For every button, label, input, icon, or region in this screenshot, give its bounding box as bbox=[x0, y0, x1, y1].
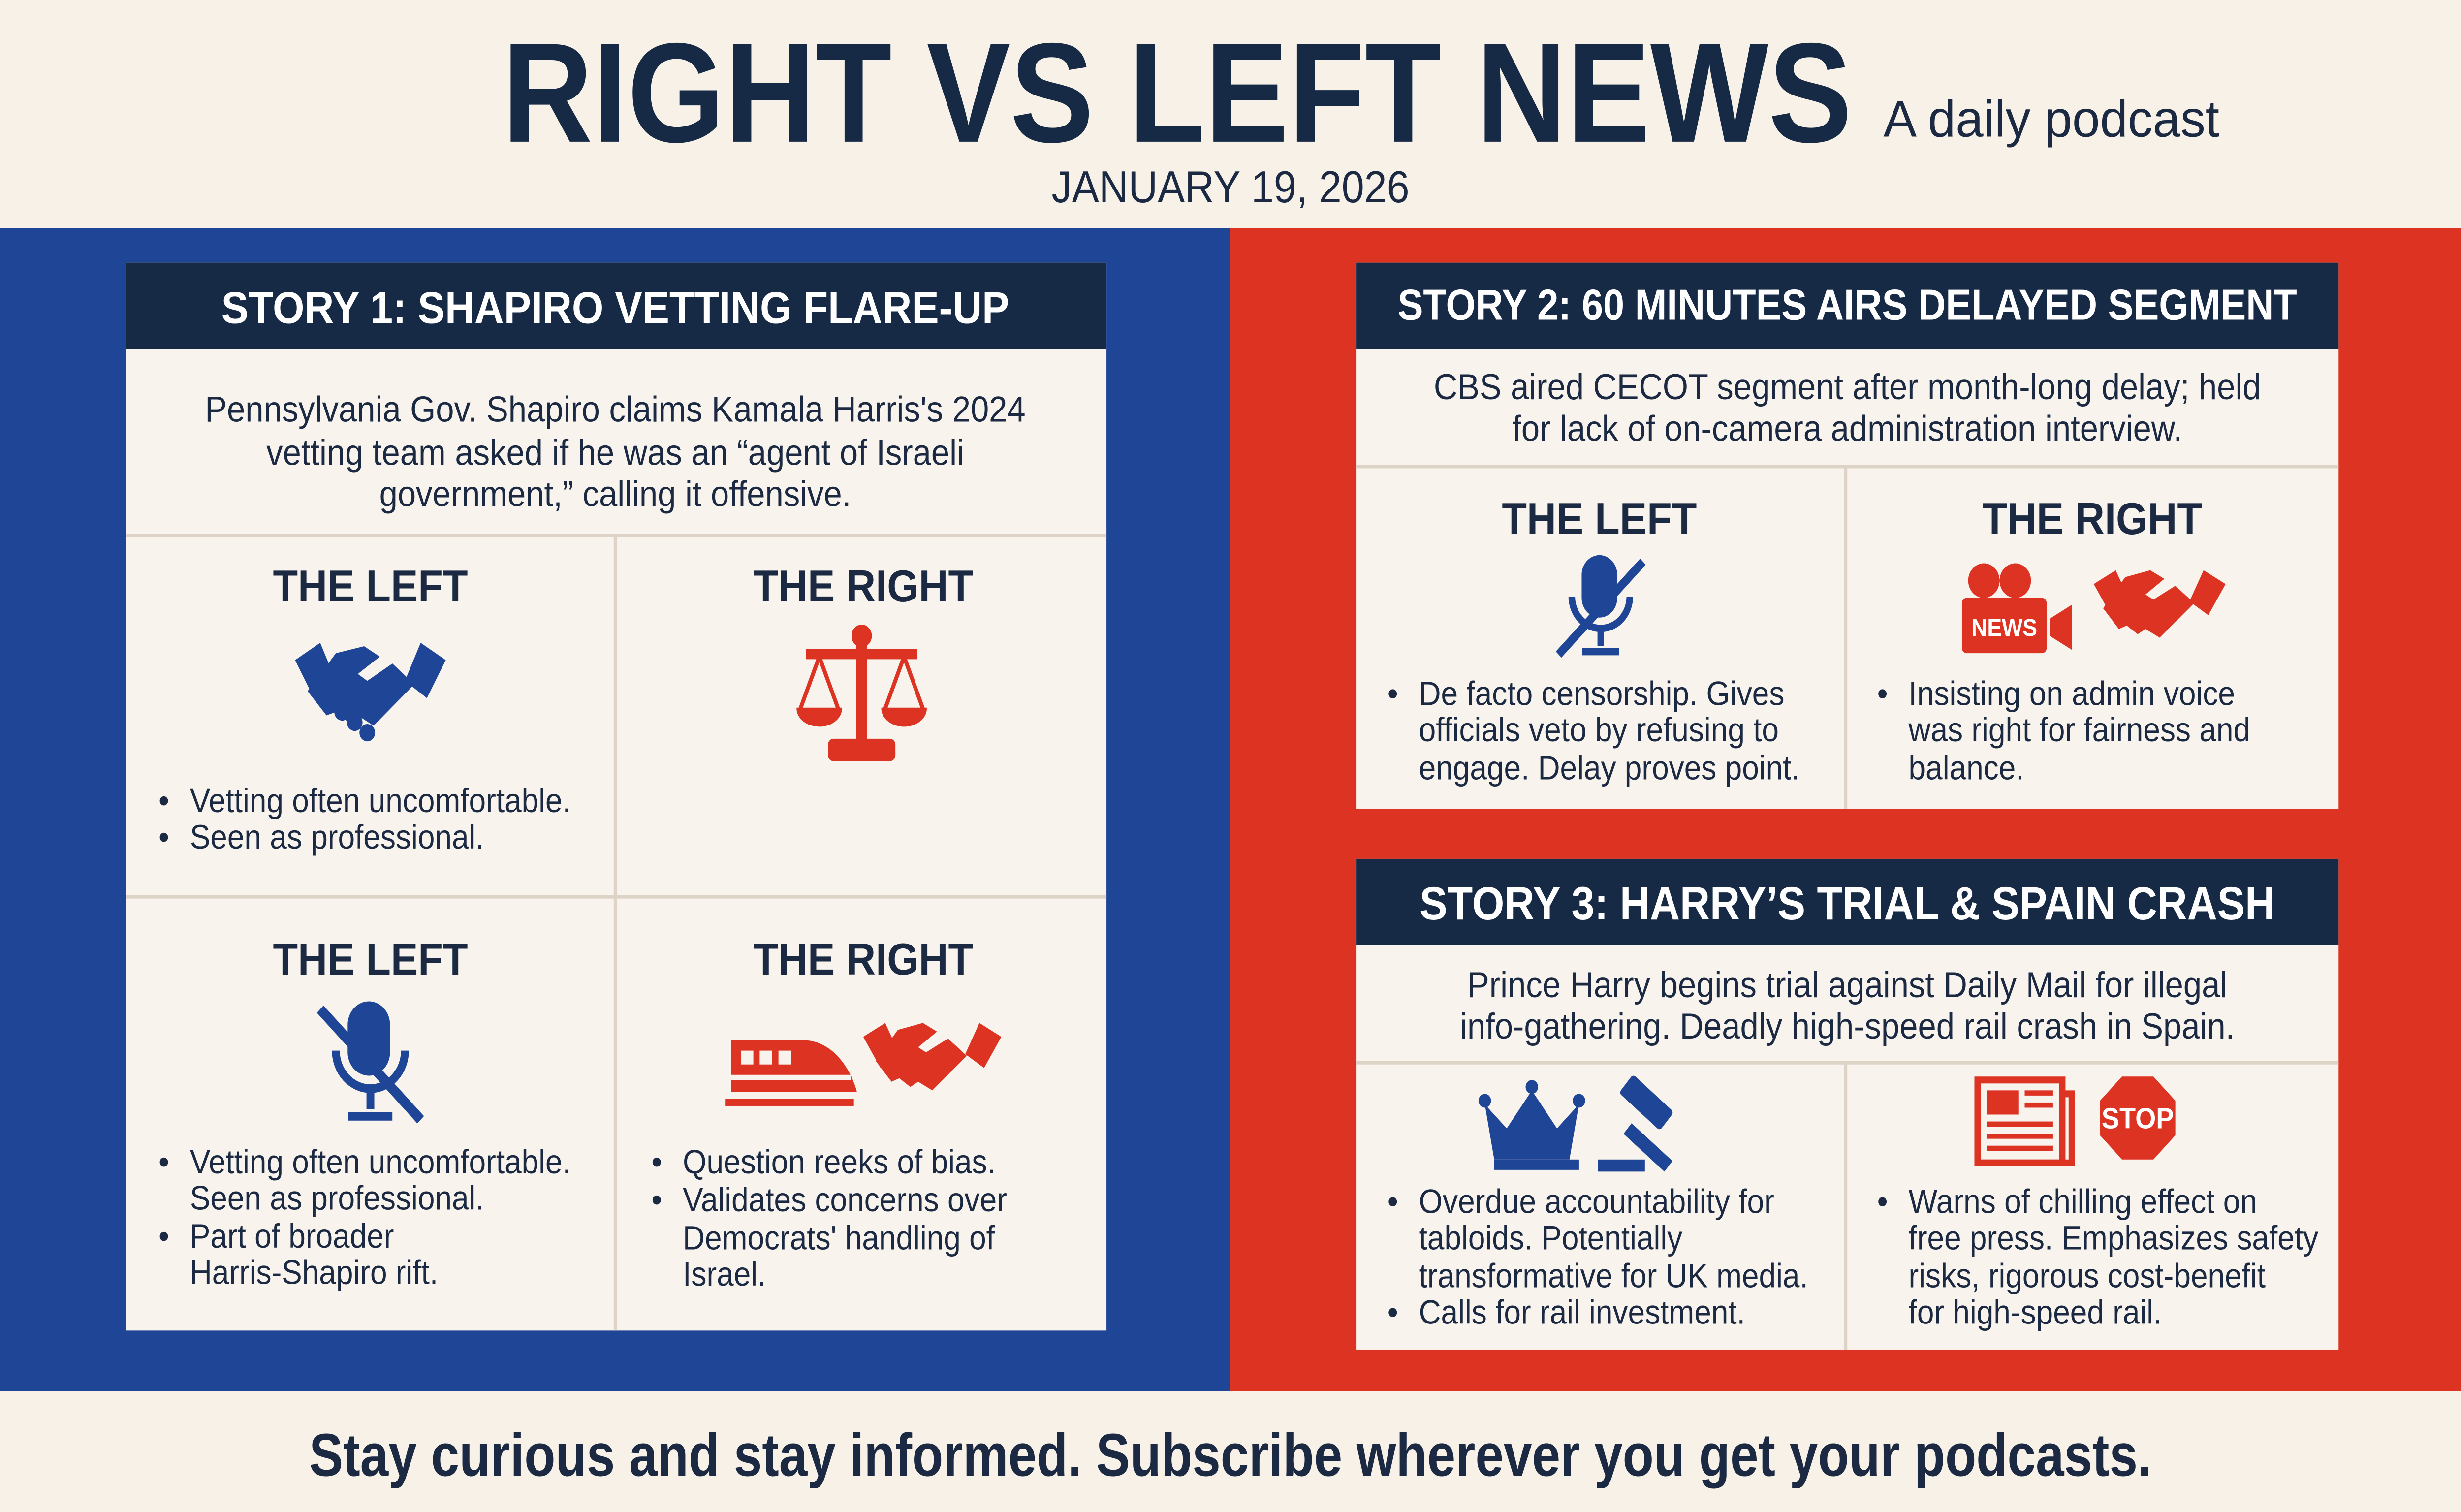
left bullets: transformative for UK media. bbox=[1419, 1257, 1808, 1294]
icon: news camera and handshake: NEWS bbox=[1971, 614, 2037, 641]
right bullets: was right for fairness and bbox=[1908, 711, 2250, 749]
story 2 intro: for lack of on-camera administration interview. bbox=[1512, 408, 2182, 448]
right heading: THE RIGHT bbox=[1982, 494, 2202, 544]
right bullets 2: Question reeks of bias. bbox=[683, 1143, 996, 1181]
story 2 intro bbox=[1434, 366, 2261, 448]
left heading 1: THE LEFT bbox=[273, 561, 468, 611]
left bullets 1: Vetting often uncomfortable. bbox=[190, 782, 571, 819]
story 2 heading bbox=[1356, 263, 2338, 349]
story 1 heading bbox=[126, 263, 1106, 349]
left bullets: Overdue accountability for bbox=[1419, 1183, 1774, 1220]
icon: news camera and handshake bbox=[1962, 564, 2226, 653]
right heading 2: THE RIGHT bbox=[753, 934, 973, 984]
left bullets 1 bbox=[158, 782, 571, 855]
story 1 intro: Pennsylvania Gov. Shapiro claims Kamala Harris's 2024 bbox=[205, 389, 1026, 429]
left bullets: engage. Delay proves point. bbox=[1419, 749, 1800, 787]
subtitle: A daily podcast bbox=[1884, 90, 2219, 148]
right bullets 2: • bbox=[651, 1143, 662, 1181]
icon: scales bbox=[797, 626, 926, 760]
left bullets: • bbox=[1388, 675, 1398, 712]
story 1 intro bbox=[205, 389, 1026, 514]
story 3 heading: STORY 3: HARRY’S TRIAL & SPAIN CRASH bbox=[1420, 878, 2275, 930]
panel: story 3 bbox=[1356, 859, 2338, 1350]
left bullets: • bbox=[1388, 1183, 1398, 1220]
left bullets 1: • bbox=[158, 818, 169, 855]
right bullets: balance. bbox=[1909, 749, 2024, 787]
right bullets 2: • bbox=[651, 1181, 662, 1219]
blue panel bbox=[0, 228, 1230, 1391]
story 2 heading: STORY 2: 60 MINUTES AIRS DELAYED SEGMENT bbox=[1398, 281, 2297, 329]
icon: crown and gavel bbox=[1479, 1074, 1674, 1171]
panel: story 2 bbox=[1356, 263, 2338, 809]
right bullets 2: Democrats' handling of bbox=[683, 1219, 995, 1257]
right bullets 2: Validates concerns over bbox=[683, 1181, 1007, 1219]
left heading 2: THE LEFT bbox=[273, 934, 468, 984]
story 1 intro: government,” calling it offensive. bbox=[379, 473, 851, 514]
left bullets 2: • bbox=[158, 1143, 169, 1181]
story 3 intro: Prince Harry begins trial against Daily Mail for illegal bbox=[1467, 964, 2227, 1005]
right bullets bbox=[1877, 675, 2250, 787]
story 3 intro bbox=[1460, 964, 2235, 1046]
left bullets: De facto censorship. Gives bbox=[1419, 675, 1784, 712]
right bullets: Warns of chilling effect on bbox=[1909, 1183, 2257, 1220]
right bullets 2: Israel. bbox=[683, 1255, 766, 1293]
right bullets: Insisting on admin voice bbox=[1909, 675, 2235, 712]
story 1 heading: STORY 1: SHAPIRO VETTING FLARE-UP bbox=[221, 283, 1009, 333]
right bullets: risks, rigorous cost-benefit bbox=[1909, 1257, 2266, 1294]
left bullets: Calls for rail investment. bbox=[1419, 1293, 1745, 1331]
left bullets bbox=[1388, 675, 1800, 787]
story 1 intro: vetting team asked if he was an “agent of Israeli bbox=[266, 432, 964, 472]
icon: train and handshake bbox=[725, 1023, 1001, 1106]
right bullets: free press. Emphasizes safety bbox=[1909, 1219, 2318, 1257]
right bullets 2 bbox=[651, 1143, 1007, 1293]
left bullets: officials veto by refusing to bbox=[1419, 711, 1779, 749]
title: RIGHT VS LEFT NEWS bbox=[502, 14, 1852, 172]
story 2 intro: CBS aired CECOT segment after month-long delay; held bbox=[1434, 366, 2261, 407]
story 3 intro: info-gathering. Deadly high-speed rail crash in Spain. bbox=[1460, 1006, 2235, 1046]
right bullets: • bbox=[1877, 675, 1888, 712]
icon: newspaper and stop sign: STOP bbox=[2102, 1102, 2174, 1135]
left bullets bbox=[1388, 1183, 1808, 1331]
left heading: THE LEFT bbox=[1502, 494, 1697, 544]
left bullets 2: Seen as professional. bbox=[190, 1179, 484, 1217]
icon: newspaper and stop sign bbox=[1978, 1076, 2176, 1163]
left bullets 2: Part of broader bbox=[190, 1217, 394, 1255]
red panel bbox=[1230, 228, 2461, 1391]
icon: mic slashed bbox=[320, 1006, 421, 1120]
date: JANUARY 19, 2026 bbox=[1051, 162, 1410, 212]
left bullets 1: Seen as professional. bbox=[190, 818, 484, 855]
left bullets: tabloids. Potentially bbox=[1419, 1219, 1683, 1257]
left bullets 2: Vetting often uncomfortable. bbox=[190, 1143, 571, 1181]
right bullets: for high-speed rail. bbox=[1909, 1293, 2162, 1331]
right heading 1: THE RIGHT bbox=[753, 561, 973, 611]
left bullets 1: • bbox=[158, 782, 169, 819]
right bullets: • bbox=[1877, 1183, 1888, 1220]
icon: handshake blue bbox=[295, 643, 446, 741]
left bullets: • bbox=[1388, 1293, 1398, 1331]
footer: Stay curious and stay informed. Subscribe wherever you get your podcasts. bbox=[309, 1421, 2152, 1488]
left bullets 2: Harris-Shapiro rift. bbox=[190, 1254, 438, 1291]
icon: mic slashed bbox=[1559, 559, 1643, 655]
story 3 heading bbox=[1356, 859, 2338, 945]
left bullets 2: • bbox=[158, 1217, 169, 1255]
panel: story 1 bbox=[126, 263, 1106, 1330]
left bullets 2 bbox=[158, 1143, 571, 1291]
right bullets bbox=[1877, 1183, 2318, 1331]
